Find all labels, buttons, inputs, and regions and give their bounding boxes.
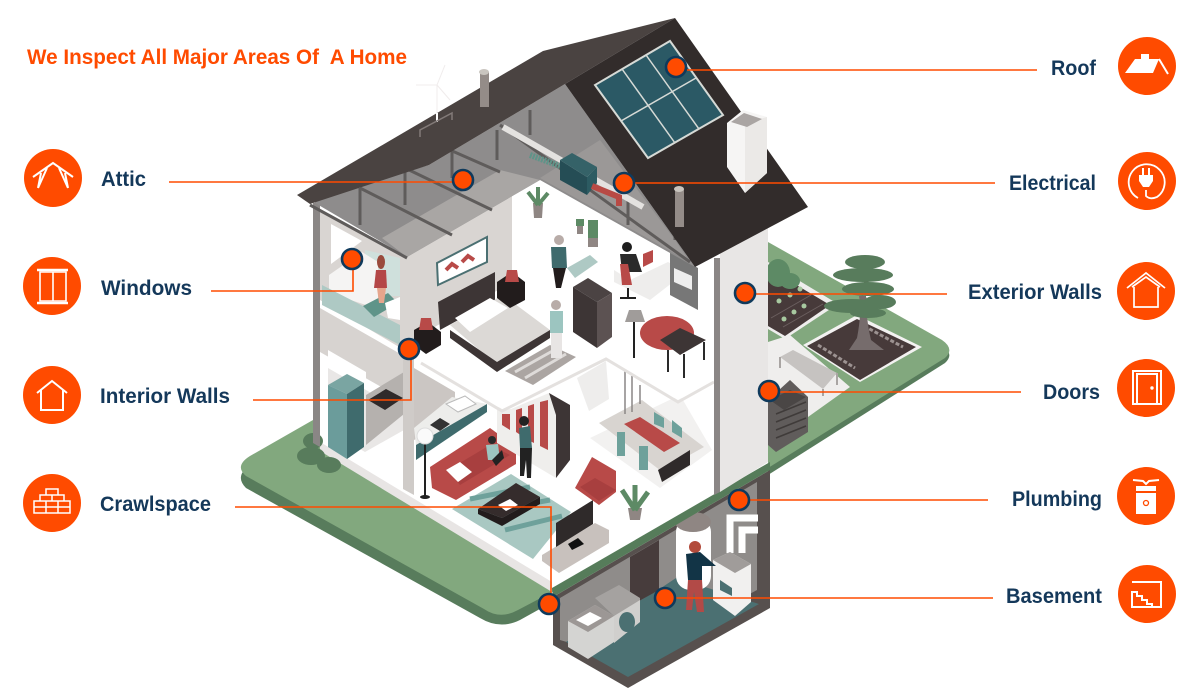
woman in bathroom	[374, 255, 387, 303]
stairs	[577, 361, 609, 411]
red pipe	[592, 186, 619, 206]
upper floor	[320, 180, 718, 411]
nightstand with lamp	[414, 318, 441, 354]
label: Electrical	[1009, 172, 1096, 195]
woman at bookshelf	[519, 416, 532, 478]
bathroom	[320, 210, 404, 350]
label: Interior Walls	[100, 385, 230, 408]
duct pipe	[503, 127, 643, 207]
main upper floor	[404, 180, 718, 409]
older person standing	[550, 300, 563, 358]
garden lawn right	[766, 242, 949, 475]
interior pillar	[403, 352, 414, 495]
icon: roof	[1118, 37, 1176, 95]
floor lamp	[625, 310, 645, 358]
armchair	[575, 457, 616, 505]
bedroom back wall	[404, 196, 512, 345]
man walking	[551, 235, 567, 288]
illustration: house cutaway	[241, 18, 949, 688]
item: attic	[24, 149, 146, 207]
tv	[556, 500, 593, 550]
label: Exterior Walls	[968, 281, 1102, 304]
item: electrical	[1009, 152, 1176, 210]
person on sofa	[486, 436, 504, 466]
label: Windows	[101, 277, 192, 300]
icon: house	[1117, 262, 1175, 320]
item: windows	[23, 257, 192, 315]
marker dots	[342, 57, 779, 614]
bed	[438, 272, 550, 372]
kitchen island	[414, 396, 487, 460]
coffee table	[478, 483, 540, 526]
label: Roof	[1051, 57, 1097, 80]
roof vent pipe	[479, 69, 489, 107]
right front wall	[714, 210, 768, 495]
connector lines	[169, 70, 1037, 598]
water heater	[675, 512, 711, 590]
wardrobe	[573, 278, 612, 348]
chimney	[727, 110, 767, 193]
slab edges	[421, 359, 714, 411]
icon: window	[23, 257, 81, 315]
solar panel	[595, 41, 723, 158]
desk with person	[614, 242, 698, 310]
label: Doors	[1043, 381, 1100, 404]
item: roof	[1051, 37, 1176, 95]
boiler and pipes	[713, 518, 758, 616]
living room	[417, 361, 712, 573]
laundry sink cabinet	[568, 605, 614, 659]
dining table	[590, 371, 712, 488]
icon: water heater	[1117, 467, 1175, 525]
label: Basement	[1006, 585, 1102, 608]
item: exterior walls	[968, 262, 1175, 320]
label: Plumbing	[1012, 488, 1102, 511]
left roof plane	[297, 18, 675, 204]
washing machine	[595, 585, 640, 643]
item: basement	[1006, 565, 1176, 623]
round red table and desk	[640, 316, 706, 378]
right roof plane	[565, 18, 808, 267]
item: plumbing	[1012, 467, 1175, 525]
framed wall art	[437, 237, 487, 285]
wind turbine	[416, 65, 452, 137]
tree	[824, 255, 896, 350]
icon: house	[23, 366, 81, 424]
air handler box	[560, 153, 597, 195]
lawn left	[241, 420, 556, 625]
label: Crawlspace	[100, 493, 211, 516]
striped rug	[505, 345, 576, 385]
icon: door	[1117, 359, 1175, 417]
kitchen	[320, 308, 487, 495]
potted plant	[622, 485, 648, 520]
floor lamp	[417, 428, 433, 499]
nightstand with lamp	[497, 270, 525, 308]
icon: attic truss	[24, 149, 82, 207]
sofa	[430, 428, 516, 500]
basement	[553, 470, 770, 688]
left outer wall	[313, 203, 320, 447]
roof	[297, 18, 808, 267]
icon: basement stairs	[1118, 565, 1176, 623]
item: interior walls	[23, 366, 230, 424]
bookshelf	[497, 393, 570, 478]
item: crawlspace	[23, 474, 211, 532]
icon: plug	[1118, 152, 1176, 210]
technician	[686, 541, 716, 612]
duct coil	[530, 155, 560, 166]
rug	[452, 474, 571, 559]
tv stand	[542, 523, 609, 573]
icon: bricks	[23, 474, 81, 532]
roof vent pipe	[674, 186, 684, 227]
title: We Inspect All Major Areas Of A Home	[27, 46, 407, 69]
fridge	[328, 374, 364, 459]
ground floor slab	[320, 300, 770, 597]
shrubs	[297, 433, 341, 473]
AC unit	[768, 380, 808, 452]
garden bench	[780, 350, 837, 396]
plants in upper room	[528, 187, 598, 247]
item: doors	[1043, 359, 1175, 417]
attic	[310, 84, 695, 267]
label: Attic	[101, 168, 146, 191]
small rug	[567, 255, 598, 278]
